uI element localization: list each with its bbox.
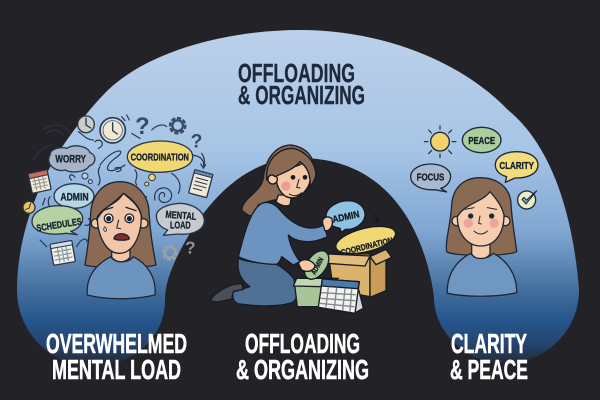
arch band: [17, 30, 579, 367]
icon: question marks: ?: [135, 113, 150, 140]
speech bubble: admin held: ADMIN: [331, 209, 361, 226]
arch heading: [238, 58, 365, 110]
speech bubble: mental load: MENTAL: [165, 210, 197, 223]
face details: [464, 208, 499, 234]
icon: question marks: [135, 113, 202, 152]
speech bubble: peace: [462, 127, 501, 153]
icon: check badge: [518, 191, 537, 209]
speech bubble: worry: [49, 146, 95, 172]
speech bubble: coordination in box: COORDINATION: [340, 235, 394, 257]
icon: wall clock small: [78, 116, 94, 133]
speech bubble: clarity: CLARITY: [499, 161, 534, 172]
speech bubble: coordination in box: [333, 221, 398, 259]
speech bubble: worry: WORRY: [55, 153, 86, 165]
arrow: down to document: [201, 153, 206, 168]
icon: question marks: ?: [191, 131, 202, 152]
person: torso and arm: [238, 202, 327, 265]
icon: small yellow clock: [23, 201, 35, 213]
label: offloading and organizing: OFFLOADING: [245, 328, 360, 359]
panel: offloading scene: [211, 145, 398, 313]
person: legs: [233, 258, 298, 306]
speech bubble: coordination: COORDINATION: [131, 152, 189, 163]
arrow: admin to box: [368, 209, 379, 222]
speech bubble: admin held: [326, 201, 365, 232]
label: overwhelmed mental load: MENTAL LOAD: [52, 354, 181, 385]
speech bubble: schedules: [32, 206, 83, 235]
speech bubble: admin: [54, 184, 94, 208]
person: calm woman: [446, 178, 517, 296]
icon: green box: [293, 278, 338, 307]
person: lower hand: [298, 260, 315, 271]
speech bubble: admin leaf: [300, 246, 334, 284]
speech bubble: clarity: [495, 152, 538, 182]
speech bubble: coordination: [127, 141, 193, 172]
speech bubble: mental load: [156, 203, 204, 235]
person: face: [276, 162, 310, 198]
icon: calendar bottom: [50, 241, 75, 265]
arch heading: & ORGANIZING: [238, 80, 365, 110]
person: hair top: [267, 148, 316, 187]
panel: overwhelmed scene: [23, 113, 213, 299]
thought dots: [82, 173, 155, 186]
label: offloading and organizing: [236, 328, 369, 385]
face details: [281, 176, 307, 196]
person: upper hand: [323, 217, 332, 231]
label: clarity and peace: & PEACE: [450, 354, 528, 385]
icon: cardboard box: [327, 249, 392, 297]
speech bubble: mental load: LOAD: [170, 221, 191, 232]
icon: document: [189, 170, 213, 198]
icon: wall clock large: [100, 118, 125, 143]
person: overwhelmed woman: [85, 182, 156, 299]
icon: calendar top left: [28, 170, 51, 193]
arch heading: OFFLOADING: [238, 58, 355, 88]
speech bubble: peace: PEACE: [468, 136, 495, 147]
icon: calendar: [318, 279, 363, 313]
label: clarity and peace: [450, 328, 528, 385]
label: overwhelmed mental load: OVERWHELMED: [46, 328, 187, 359]
person: hair back: [242, 145, 314, 216]
panel: clarity scene: [411, 126, 538, 296]
speech bubble: admin: ADMIN: [60, 191, 89, 203]
speech bubble: focus: [411, 164, 451, 192]
person: ear: [268, 175, 277, 184]
icon: question mark on dark: ?: [185, 237, 196, 257]
person: neck: [276, 195, 292, 206]
speech bubble: admin leaf: ADMIN: [309, 256, 325, 276]
label: offloading and organizing: & ORGANIZING: [236, 354, 369, 385]
speech bubble: focus: FOCUS: [417, 172, 445, 183]
face details: [103, 207, 136, 240]
icon: shoes: [211, 283, 243, 302]
label: overwhelmed mental load: [46, 328, 187, 385]
icon: gear on dark: [163, 246, 177, 260]
speech bubble: schedules: SCHEDULES: [36, 216, 83, 234]
label: clarity and peace: CLARITY: [451, 328, 527, 359]
swirling thought lines: [33, 115, 204, 247]
icon: sun: [424, 126, 456, 158]
icon: gear: [170, 118, 185, 133]
